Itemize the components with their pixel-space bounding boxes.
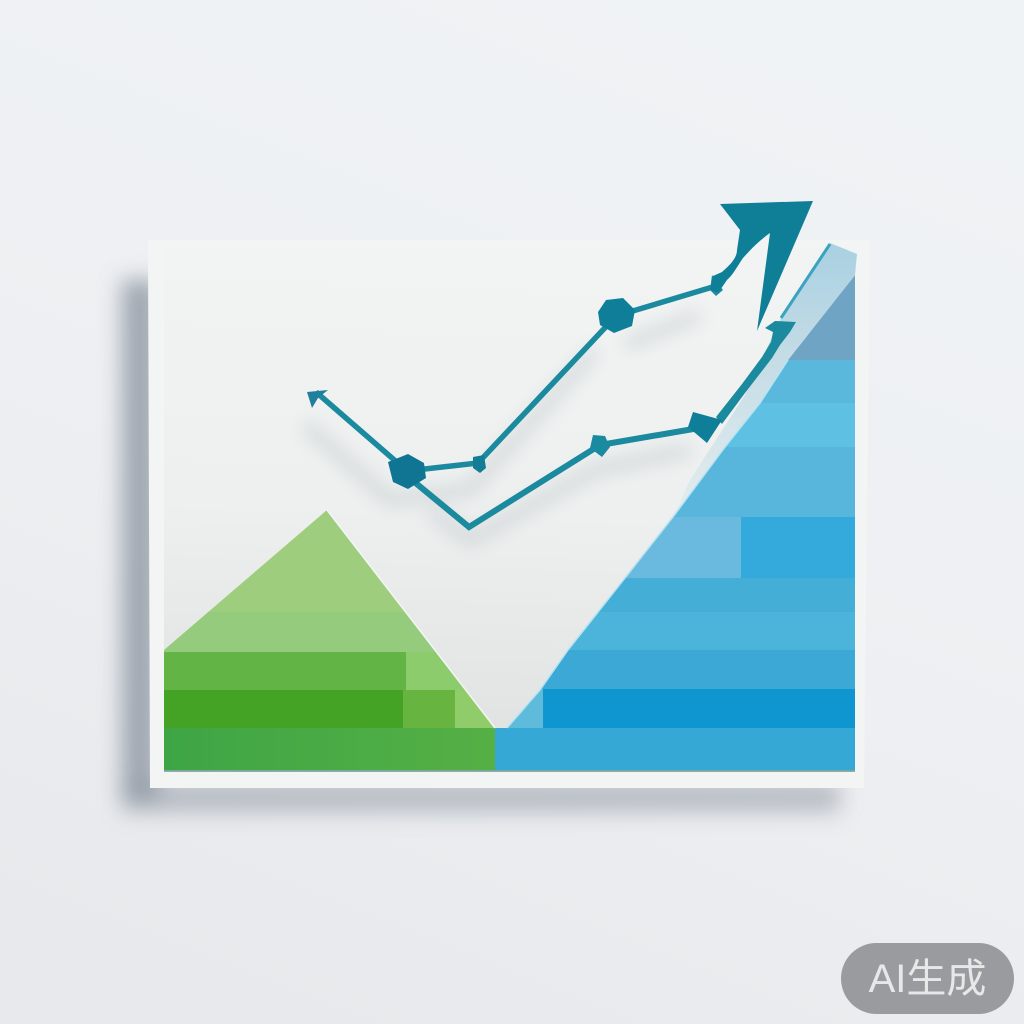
AI badge — [841, 943, 1014, 1014]
arrow head — [710, 201, 813, 331]
teal growth line chart — [307, 201, 813, 527]
badge text: AI生成 — [869, 957, 986, 1001]
slate blue triangle — [788, 275, 855, 360]
data point 1 — [388, 454, 426, 489]
line start tick — [307, 390, 328, 408]
data point 6 — [688, 412, 722, 443]
arrow hook — [716, 321, 796, 424]
pale diagonal stripe — [673, 243, 857, 517]
green peak edge — [327, 510, 495, 728]
blue slope highlight — [507, 360, 788, 728]
green area chart — [164, 510, 495, 771]
badge pill — [841, 943, 1014, 1014]
data point 3 — [598, 298, 635, 333]
data point 2 — [473, 455, 486, 473]
blue area chart — [495, 275, 855, 771]
frame drop shadow — [122, 280, 840, 812]
illustration canvas — [108, 201, 1014, 1014]
data point 4 — [710, 275, 723, 296]
data point 5 — [590, 435, 610, 457]
inner panel — [164, 248, 855, 771]
lower line segments — [412, 427, 705, 527]
panel bottom edge — [164, 770, 855, 772]
white frame border — [148, 240, 870, 788]
teal stripe edge — [781, 244, 830, 318]
chart line soft shadow — [305, 315, 700, 540]
upper line segments — [316, 286, 716, 471]
picture frame — [148, 240, 870, 788]
